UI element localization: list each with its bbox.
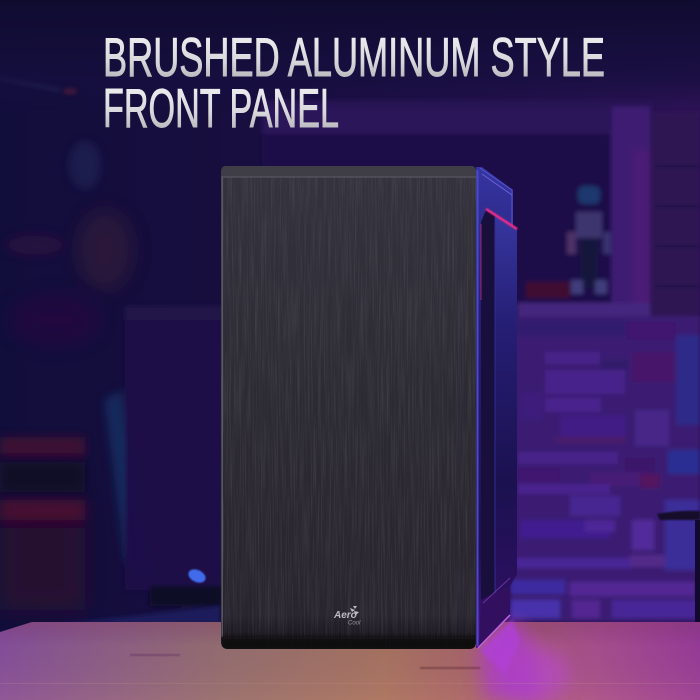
title [103, 26, 605, 139]
shelf [125, 100, 652, 320]
brand logo [333, 606, 361, 626]
left glow: chair and red lights [0, 141, 150, 610]
lower corner [479, 586, 510, 647]
brand logo: Aero [333, 610, 357, 621]
computer case [221, 166, 517, 650]
lamp base shadow [150, 586, 222, 606]
brick wall [510, 316, 700, 622]
right blue shape [665, 335, 700, 570]
magenta light [486, 209, 517, 229]
front brushed panel [221, 166, 477, 650]
dark wall left of case [125, 320, 221, 590]
side window panel [481, 209, 517, 600]
shelf figure [567, 186, 611, 294]
case side [476, 167, 517, 648]
right stool [657, 511, 700, 520]
brand logo: Cool [348, 620, 361, 626]
cable streak [0, 78, 60, 90]
blue lamp glow [186, 567, 208, 585]
top fade behind title [0, 0, 700, 110]
table top [0, 618, 700, 700]
title: FRONT PANEL [103, 77, 339, 139]
upper brick wall [650, 112, 700, 317]
